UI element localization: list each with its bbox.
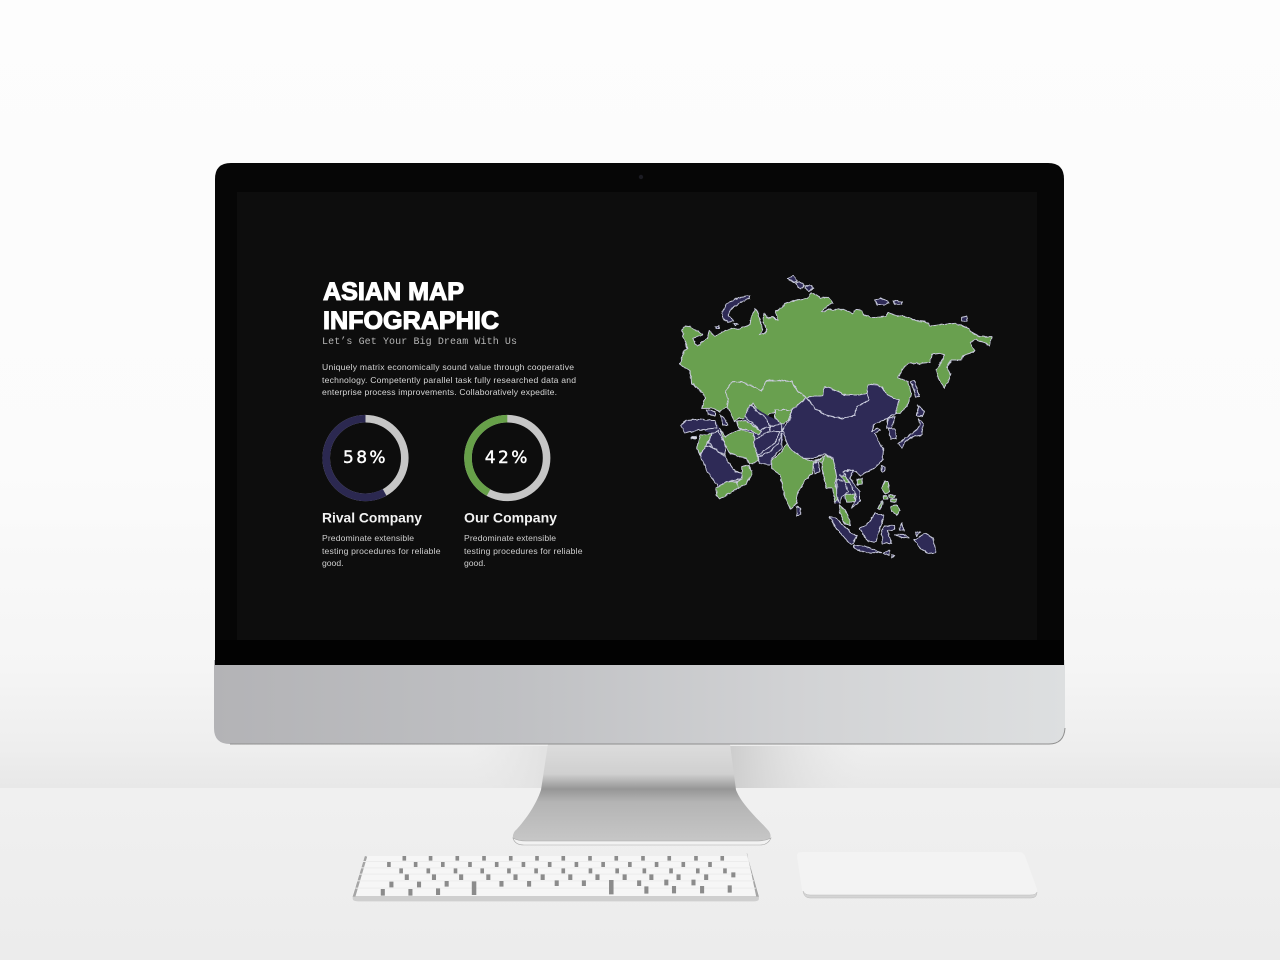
rival company text: testing procedures for reliable: [322, 546, 441, 556]
webcam: [639, 175, 643, 179]
intro paragraph: Uniquely matrix economically sound value through cooperative: [322, 362, 574, 372]
oman: [737, 465, 752, 488]
uzbekistan: [745, 405, 770, 430]
donut chart: rival company 58%: [326, 419, 405, 497]
afghanistan: [753, 432, 780, 455]
southeast and east asia: [813, 405, 936, 557]
hainan: [857, 478, 862, 485]
laos: [840, 475, 849, 483]
keyboard: [353, 853, 759, 901]
korea: [887, 417, 897, 439]
monitor stand: [513, 744, 771, 845]
title: ASIAN MAP: [323, 278, 464, 306]
monitor: [214, 163, 1065, 744]
our company text: testing procedures for reliable: [464, 546, 583, 556]
rival company text: good.: [322, 558, 344, 568]
title: INFOGRAPHIC: [323, 307, 499, 335]
subtitle: Let’s Get Your Big Dream With Us: [322, 336, 517, 348]
tajikistan: [770, 424, 782, 432]
intro paragraph: [322, 362, 576, 397]
monitor bezel: [215, 163, 1064, 665]
our company text: [464, 510, 583, 568]
iran: [720, 428, 758, 464]
backdrop: levant region: [703, 420, 725, 455]
kyrgyzstan: [775, 410, 792, 424]
myanmar: [822, 455, 838, 503]
sri lanka: [797, 507, 801, 516]
turkmenistan: [737, 420, 762, 435]
intro paragraph: technology. Competently parallel task fully researched data and: [322, 375, 576, 385]
india: [772, 443, 833, 509]
georgia: [707, 410, 715, 417]
central asia and southwest asia: [681, 405, 801, 516]
keyboard row lines: [355, 861, 756, 889]
our company text: Our Company: [464, 510, 557, 526]
kazakhstan: [725, 381, 807, 424]
backdrop: indochina: [822, 455, 860, 508]
pakistan: [758, 433, 782, 465]
mongolia: [807, 387, 869, 418]
arctic islands east: [875, 298, 968, 397]
yemen: [716, 482, 738, 498]
map of asia: [680, 276, 992, 557]
japan: [898, 405, 925, 448]
title: [323, 278, 499, 335]
philippines: [878, 481, 900, 515]
jordan: [697, 433, 712, 455]
rival company text: Predominate extensible: [322, 533, 414, 543]
monitor chin: [214, 660, 1065, 744]
rival company text: Rival Company: [322, 510, 422, 526]
donut chart: our company 42%: [468, 419, 547, 497]
trackpad: [797, 852, 1037, 898]
cyprus: [692, 437, 696, 438]
turkey: [681, 419, 717, 433]
russia: [680, 293, 992, 413]
our company text: good.: [464, 558, 486, 568]
monitor screen: [237, 192, 1037, 640]
cambodia: [845, 493, 855, 502]
taiwan: [882, 465, 885, 472]
malaysia: [839, 505, 851, 525]
our company text: Predominate extensible: [464, 533, 556, 543]
indonesia: [829, 513, 936, 557]
saudi arabia: [700, 445, 743, 487]
arctic islands west: [716, 276, 813, 329]
bangladesh: [813, 462, 820, 473]
azerbaijan: [720, 415, 727, 425]
rival company text: [322, 510, 441, 568]
intro paragraph: enterprise process improvements. Collaboratively expedite.: [322, 387, 557, 397]
donut chart: our company 42%: 42%: [485, 448, 530, 468]
iraq: [708, 431, 725, 455]
keyboard body: [353, 856, 759, 899]
keyboard key gaps: [381, 856, 735, 896]
backdrop: afghanistan region: [738, 405, 785, 465]
monitor lower bezel: [215, 640, 1064, 665]
thailand: [837, 480, 848, 503]
donut chart: rival company 58%: 58%: [343, 448, 388, 468]
vietnam: [843, 470, 860, 508]
china: [782, 384, 899, 477]
